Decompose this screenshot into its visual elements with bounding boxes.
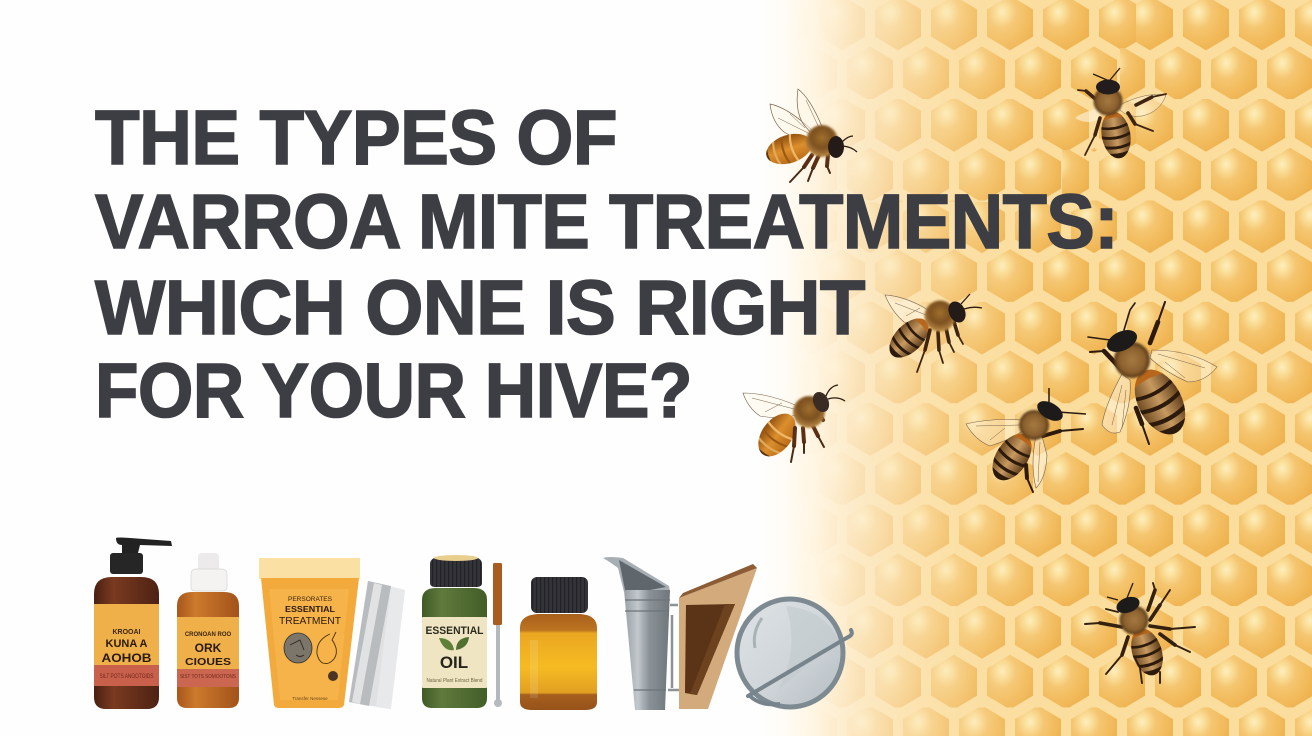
product: essential oil bottle: ESSENTIAL [426,625,484,637]
product: essential oil bottle: OIL [440,653,468,672]
title: WHICH ONE IS RIGHT [95,265,865,351]
bee: bottom right [1085,583,1195,683]
product: pump bottle: AOHOB [102,651,152,665]
product: amber jar [520,577,597,710]
title: FOR YOUR HIVE? [95,348,692,434]
product: treatment tube: PERSORATES [288,596,333,603]
product: mite strips [349,581,405,709]
product: dropper bottle [177,553,239,708]
product: essential oil bottle: Natural Plant Extract Blend [426,678,483,684]
product: dropper bottle: ORK [195,641,222,655]
product: dropper tool [493,563,502,707]
title: VARROA MITE TREATMENTS: [95,179,1118,265]
product: pump bottle: KROOAI [112,629,141,636]
bee: mid right, diagonal [966,388,1086,492]
bee: flying upper left [761,89,857,182]
product: treatment tube: Transfer Nessese [292,696,328,701]
product: dropper bottle: CIOUES [185,656,231,668]
title [95,95,1118,434]
product: treatment tube: ESSENTIAL [285,605,335,614]
product: treatment tube: TREATMENT [279,615,342,627]
product: treatment tube [259,558,360,708]
honeycomb background [739,0,1312,736]
product: dropper bottle: SIST TOTS SOMOOTONS [180,674,236,680]
product: bee smoker [603,557,757,710]
bee: center, flying [882,294,982,372]
product: pump bottle: SILT POTS ANOOTOIDS [100,674,154,680]
bee: large right [1088,302,1217,444]
product: round wire tool [737,599,852,707]
bee: top right, on comb [1075,68,1166,161]
product: pump bottle: KUNA A [106,638,148,650]
product: essential oil bottle [422,555,487,708]
product: dropper bottle: CRONOAN ROO [185,632,231,638]
title: THE TYPES OF [95,95,617,181]
bee: lower flying left [743,385,845,465]
product: pump bottle [94,538,172,709]
